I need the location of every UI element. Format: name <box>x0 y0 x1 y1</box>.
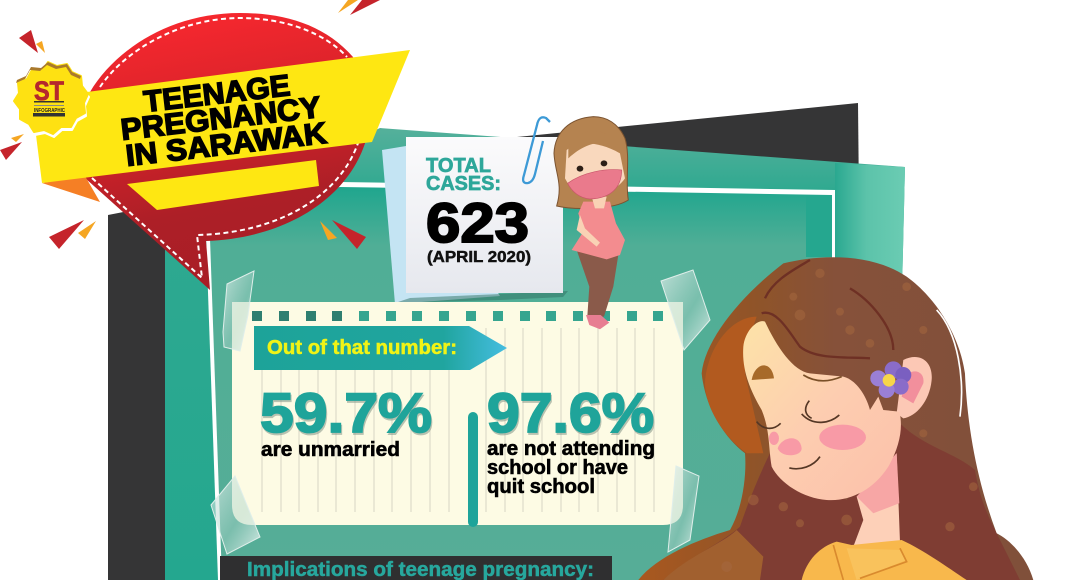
icon: flower <box>870 361 911 398</box>
yellow subtitle strip <box>127 160 319 210</box>
binder squares <box>252 311 663 321</box>
icon: paper clip <box>523 117 550 183</box>
hair speckles <box>721 269 978 572</box>
notebook panel <box>232 302 683 527</box>
blouse <box>802 540 967 580</box>
stat: not attending school: quit school <box>487 476 595 498</box>
arrow heading <box>254 326 507 370</box>
date: (APRIL 2020) <box>427 249 531 266</box>
divider <box>468 412 478 527</box>
white frame <box>205 182 835 580</box>
total cases note <box>395 137 568 303</box>
title: IN SARAWAK <box>124 117 329 173</box>
eyes <box>577 166 583 172</box>
stat: unmarried: 59.7% <box>260 381 432 444</box>
closed eyes and smile <box>757 401 839 469</box>
ear <box>897 357 932 418</box>
hair highlight strand <box>937 310 962 417</box>
body <box>572 202 625 259</box>
title banner <box>36 50 410 183</box>
stat: not attending school: school or have <box>487 457 628 479</box>
hair <box>638 257 1033 580</box>
stat: not attending school: 97.6% <box>487 381 654 444</box>
stat: unmarried: are unmarried <box>261 439 400 461</box>
title <box>119 69 329 173</box>
stat: unmarried: 59.7% <box>261 383 433 446</box>
large girl illustration <box>638 257 1033 580</box>
mask <box>568 170 622 199</box>
teal back sheet <box>165 128 905 580</box>
ST logo badge <box>14 62 89 137</box>
ST logo badge: INFOGRAPHIC <box>34 108 65 114</box>
stat: not attending school: 97.6% <box>488 383 655 446</box>
eyebrow and blush <box>752 365 866 455</box>
stat: not attending school <box>487 381 655 498</box>
title: PREGNANCY <box>119 91 322 147</box>
blue sheet behind note <box>382 146 500 304</box>
hair back <box>554 117 628 208</box>
arrow heading: Out of that number: <box>267 337 457 359</box>
ST logo badge: ST <box>34 76 64 106</box>
tape pieces <box>211 270 710 554</box>
banner fold <box>42 176 100 202</box>
neck and arm <box>577 197 607 247</box>
small pregnant girl with mask <box>554 117 628 329</box>
fringe <box>568 131 621 158</box>
neck <box>853 453 900 547</box>
orange hair side <box>663 530 763 580</box>
total cases label <box>426 155 501 195</box>
face <box>565 144 625 195</box>
fringe stroke <box>762 260 893 358</box>
case count: 623 <box>426 191 529 254</box>
title: TEENAGE <box>142 69 292 119</box>
left sparks <box>0 30 366 249</box>
total cases label: CASES: <box>426 173 501 195</box>
stat: not attending school: are not attending <box>487 438 655 460</box>
total cases label: TOTAL <box>426 155 491 177</box>
legs <box>577 250 618 317</box>
lower hair <box>663 423 1020 580</box>
dark backing panel <box>108 103 860 580</box>
speech bubble <box>80 13 368 290</box>
face <box>743 321 901 500</box>
top sparks <box>338 0 380 15</box>
